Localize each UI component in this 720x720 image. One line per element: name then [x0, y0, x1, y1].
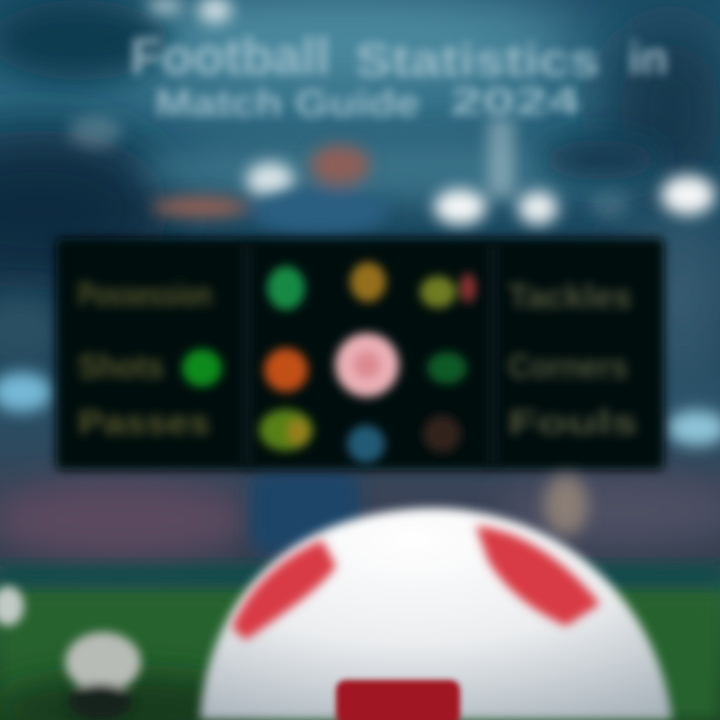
title: Football — [130, 28, 330, 86]
left labels — [78, 276, 212, 442]
right labels: Tackles — [508, 278, 632, 316]
status icons — [182, 262, 476, 463]
title: Statistics — [355, 34, 600, 86]
small balls on pitch — [0, 586, 141, 720]
right labels: Fouls — [508, 404, 638, 442]
player figure — [152, 145, 388, 555]
left labels: Possession — [78, 276, 212, 314]
right labels — [508, 278, 638, 442]
title: 2024 — [450, 81, 580, 123]
left labels: Passes — [78, 404, 210, 442]
title: in — [628, 32, 668, 84]
title: Match Guide — [155, 83, 420, 125]
left labels: Shots — [78, 348, 164, 386]
right labels: Corners — [508, 348, 628, 386]
soccer ball — [200, 508, 672, 720]
distant ball right — [544, 475, 588, 535]
stadium lights — [0, 0, 720, 446]
stats board panel — [56, 238, 664, 470]
title — [130, 28, 668, 125]
